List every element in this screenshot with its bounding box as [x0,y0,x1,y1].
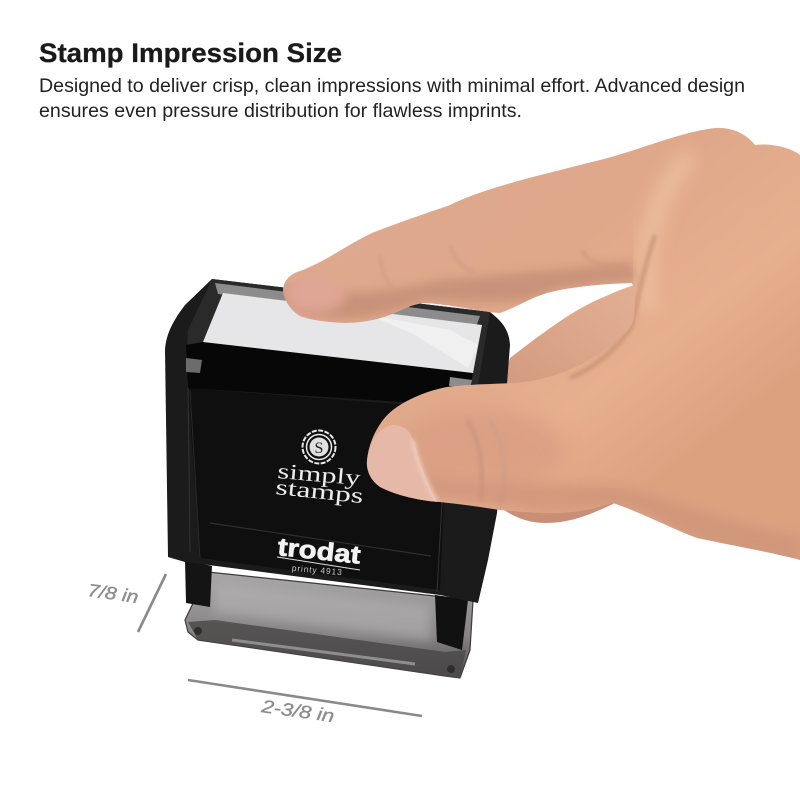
logo: trodat printy 4913 [276,533,363,577]
dimension: 2-3/8 in: 2-3/8 in [259,696,336,726]
thumb rosy tone [410,412,559,484]
description text [39,75,745,122]
front panel [188,388,448,590]
dimension: 2-3/8 in [188,680,422,726]
thumb nail [367,425,437,502]
stamp [165,279,510,678]
hand: fingers behind the stamp [497,283,650,523]
body [165,279,510,603]
dimension: 7/8 in: 7/8 in [86,580,140,607]
top label [203,293,482,373]
dark band [186,342,473,405]
thumb underside shading [430,478,800,560]
logo: simply stamps [274,430,365,508]
title: Stamp Impression Size [39,38,342,68]
clear base [185,572,473,678]
logo: trodat printy 4913: printy 4913 [291,563,343,577]
thumb knuckle creases [468,422,484,483]
logo: trodat printy 4913: trodat [276,533,363,570]
index finger underside shading [283,262,640,319]
description text: Designed to deliver crisp, clean impressions with minimal effort. Advanced design [39,75,745,97]
dimension: 7/8 in [86,574,166,632]
description text: ensures even pressure distribution for flawless imprints. [39,100,522,122]
logo: simply stamps: stamps [274,474,365,508]
clear top frame [186,279,490,385]
logo: simply stamps: S [315,440,323,457]
crease between index and palm [570,235,655,378]
hand: index finger, palm and thumb [283,128,800,570]
left pillar [185,560,212,607]
right pillar [435,595,468,650]
logo: simply stamps: simply [277,458,361,490]
fingertip tone [285,277,345,313]
knuckle highlights [646,155,690,310]
lower slot line [210,523,431,556]
